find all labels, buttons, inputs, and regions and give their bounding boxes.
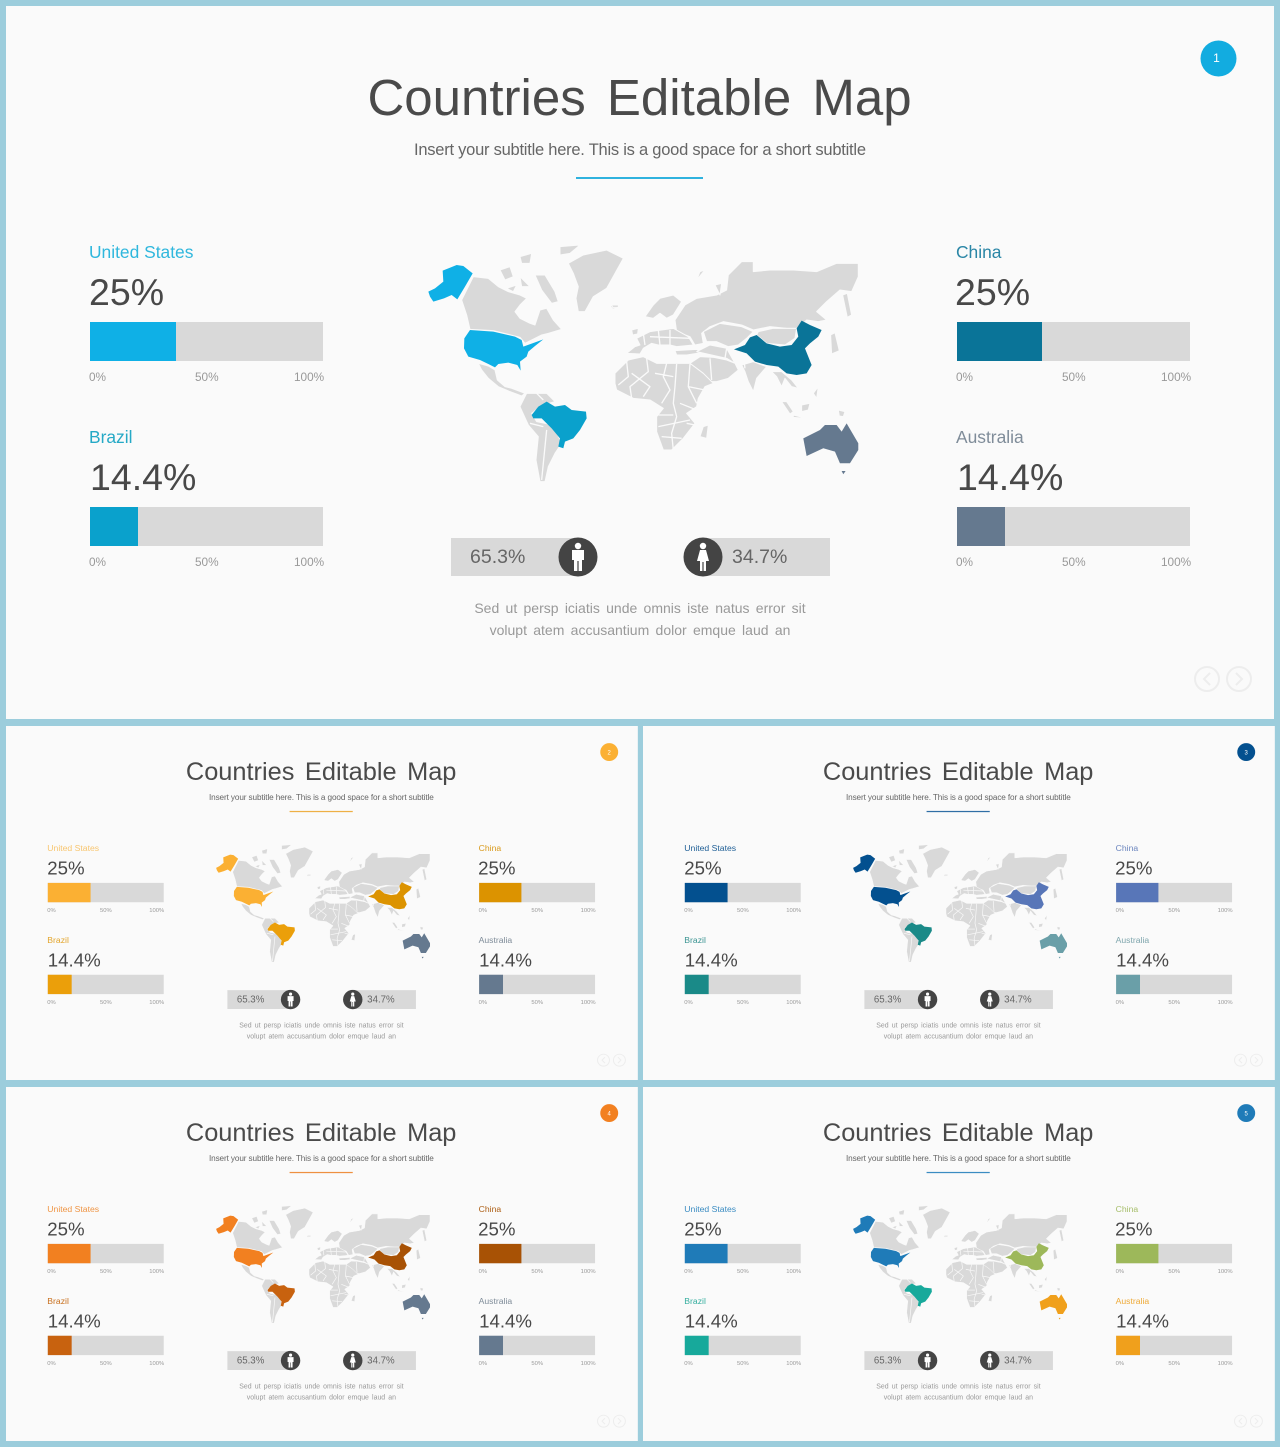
stat: Brazil: Brazil	[47, 935, 69, 945]
subtitle: Insert your subtitle here. This is a good space for a short subtitle	[846, 793, 1071, 802]
stat: Australia: 50%	[1168, 1361, 1180, 1367]
subtitle: Insert your subtitle here. This is a good space for a short subtitle	[209, 793, 434, 802]
stat: Brazil: Brazil	[684, 1296, 706, 1306]
stat: Brazil: 0%	[89, 555, 107, 569]
description: volupt atem accusantium dolor emque laud an	[247, 1033, 396, 1040]
stat: Brazil: 50%	[100, 1361, 112, 1367]
male share: 65.3%	[470, 546, 525, 568]
world map	[428, 245, 858, 482]
stat: Brazil: 100%	[786, 1000, 801, 1006]
description	[474, 600, 806, 638]
stat: United States	[684, 843, 801, 914]
stat: China: 50%	[531, 908, 543, 914]
description	[239, 1022, 404, 1040]
stat: Australia: Australia	[1116, 935, 1149, 945]
stat: United States: 0%	[89, 370, 107, 384]
stat: Brazil: Brazil	[684, 935, 706, 945]
description	[239, 1383, 404, 1401]
stat: China: 25%	[1115, 1218, 1152, 1239]
stat: United States: 50%	[195, 370, 219, 384]
title underline	[927, 1172, 990, 1173]
world map	[853, 845, 1067, 962]
male share: 65.3%	[237, 1356, 265, 1367]
stat: Brazil: 100%	[149, 1000, 164, 1006]
female share: 34.7%	[1004, 995, 1032, 1006]
stat: China	[1115, 843, 1233, 914]
stat: Australia: 0%	[1116, 1361, 1124, 1367]
stat: Brazil	[47, 1296, 164, 1367]
male share	[864, 1351, 937, 1370]
stat: Australia	[1116, 935, 1233, 1006]
stat: United States: 50%	[737, 908, 749, 914]
stat: China: China	[1116, 843, 1138, 853]
male share: 65.3%	[874, 995, 902, 1006]
page badge	[1237, 743, 1255, 761]
stat: China	[1115, 1204, 1233, 1275]
nav arrows	[1235, 1054, 1262, 1066]
page badge: 1	[1213, 51, 1220, 65]
page badge	[1200, 40, 1236, 76]
stat: Australia: 14.4%	[479, 949, 532, 970]
stat: Brazil	[47, 935, 164, 1006]
stat: United States: 100%	[294, 370, 325, 384]
stat: United States: United States	[47, 1204, 99, 1214]
stat: United States: United States	[684, 843, 736, 853]
title: Countries Editable Map	[186, 758, 456, 786]
stat: United States	[47, 843, 164, 914]
stat: Brazil	[89, 427, 325, 569]
stat: Australia: 14.4%	[957, 456, 1063, 498]
stat: United States	[684, 1204, 801, 1275]
stat: Australia: 14.4%	[1116, 1310, 1169, 1331]
stat: United States: 25%	[47, 857, 85, 878]
stat: China: 100%	[581, 1269, 596, 1275]
stat: United States: 100%	[786, 1269, 801, 1275]
stat: United States: 100%	[149, 1269, 164, 1275]
stat: Australia: 100%	[1161, 555, 1192, 569]
stat: Australia	[479, 1296, 596, 1367]
stat: United States: 25%	[47, 1218, 85, 1239]
stat: Brazil: 14.4%	[48, 1310, 101, 1331]
nav arrows	[1195, 667, 1251, 691]
title: Countries Editable Map	[823, 758, 1093, 786]
stat: Brazil: 50%	[737, 1361, 749, 1367]
title underline	[290, 811, 353, 812]
world map	[853, 1206, 1067, 1323]
stat: United States: 0%	[684, 1269, 693, 1275]
stat: Brazil: 14.4%	[685, 1310, 738, 1331]
stat: Australia: 14.4%	[479, 1310, 532, 1331]
stat: Brazil: 50%	[195, 555, 219, 569]
stat: Australia: Australia	[479, 1296, 512, 1306]
stat: China: China	[1116, 1204, 1138, 1214]
stat: China: 50%	[1168, 908, 1180, 914]
stat: China: 0%	[479, 908, 487, 914]
stat: Australia: 0%	[956, 555, 974, 569]
stat: Brazil: 0%	[684, 1361, 693, 1367]
panel: main slide 1	[6, 6, 1274, 719]
page badge: 3	[1245, 750, 1249, 756]
stat: Australia: 14.4%	[1116, 949, 1169, 970]
description: volupt atem accusantium dolor emque laud an	[884, 1394, 1033, 1401]
page badge: 5	[1245, 1111, 1249, 1117]
stat: Australia: 0%	[479, 1361, 487, 1367]
stat: China: 50%	[531, 1269, 543, 1275]
panel: slide 3 navy-teal	[643, 726, 1275, 1080]
stat: China	[478, 843, 596, 914]
stat: Australia: 100%	[1218, 1000, 1233, 1006]
male share	[227, 1351, 300, 1370]
stat: Australia: 50%	[531, 1361, 543, 1367]
stat: Australia: 100%	[1218, 1361, 1233, 1367]
title: Countries Editable Map	[186, 1119, 456, 1147]
stat: Australia: 100%	[581, 1361, 596, 1367]
title underline	[576, 177, 703, 179]
stat: United States: 50%	[737, 1269, 749, 1275]
stat: United States: 25%	[684, 1218, 722, 1239]
female share: 34.7%	[732, 546, 787, 568]
female share	[343, 990, 416, 1009]
stat: United States: 50%	[100, 908, 112, 914]
stat: United States	[89, 242, 325, 384]
title underline	[927, 811, 990, 812]
stat: China: 50%	[1062, 370, 1086, 384]
stat: Brazil	[684, 1296, 801, 1367]
subtitle: Insert your subtitle here. This is a good space for a short subtitle	[209, 1154, 434, 1163]
page badge: 4	[608, 1111, 612, 1117]
description	[876, 1383, 1041, 1401]
stat: Australia: 50%	[1062, 555, 1086, 569]
stat: Australia: 50%	[1168, 1000, 1180, 1006]
stat: United States: United States	[47, 843, 99, 853]
stat: United States: 0%	[47, 908, 56, 914]
stat: United States: United States	[684, 1204, 736, 1214]
stat: United States: 100%	[786, 908, 801, 914]
female share	[343, 1351, 416, 1370]
nav arrows	[1235, 1415, 1262, 1427]
stat: Brazil: 0%	[47, 1361, 56, 1367]
stat: China: 100%	[1218, 908, 1233, 914]
male share: 65.3%	[874, 1356, 902, 1367]
nav arrows	[598, 1415, 625, 1427]
stat: China: 50%	[1168, 1269, 1180, 1275]
female share	[980, 990, 1053, 1009]
stat: Brazil: 0%	[684, 1000, 693, 1006]
stat: China: 0%	[1116, 1269, 1124, 1275]
description: Sed ut persp iciatis unde omnis iste natus error sit	[474, 600, 806, 616]
description	[876, 1022, 1041, 1040]
page badge	[600, 743, 618, 761]
stat: United States: 0%	[684, 908, 693, 914]
panel: slide 2 orange-yellow	[6, 726, 638, 1080]
stat: China: 0%	[1116, 908, 1124, 914]
stat: Brazil: Brazil	[89, 427, 132, 447]
male share	[451, 538, 598, 576]
description: Sed ut persp iciatis unde omnis iste natus error sit	[239, 1022, 404, 1029]
page badge	[1237, 1104, 1255, 1122]
stat: United States: United States	[89, 242, 194, 262]
stat: China: 0%	[956, 370, 974, 384]
title underline	[290, 1172, 353, 1173]
stat: China: China	[479, 843, 501, 853]
stat: Brazil	[684, 935, 801, 1006]
stat: Brazil: 100%	[294, 555, 325, 569]
stat: United States	[47, 1204, 164, 1275]
panel: slide 5 multicolour	[643, 1087, 1275, 1441]
description: volupt atem accusantium dolor emque laud an	[884, 1033, 1033, 1040]
stat: Australia: 0%	[479, 1000, 487, 1006]
description: volupt atem accusantium dolor emque laud an	[247, 1394, 396, 1401]
stat: Brazil: 100%	[149, 1361, 164, 1367]
stat: Australia: Australia	[479, 935, 512, 945]
stat: China: 25%	[478, 857, 515, 878]
description: Sed ut persp iciatis unde omnis iste natus error sit	[876, 1022, 1041, 1029]
stat: Australia	[479, 935, 596, 1006]
stat: Australia: 50%	[531, 1000, 543, 1006]
stat: Australia: 0%	[1116, 1000, 1124, 1006]
female share: 34.7%	[367, 995, 395, 1006]
world map	[216, 845, 430, 962]
stat: China: 100%	[1161, 370, 1192, 384]
subtitle: Insert your subtitle here. This is a good space for a short subtitle	[846, 1154, 1071, 1163]
stat: United States: 100%	[149, 908, 164, 914]
male share: 65.3%	[237, 995, 265, 1006]
stat: Australia	[956, 427, 1192, 569]
stat: China	[478, 1204, 596, 1275]
stat: United States: 25%	[89, 271, 164, 313]
description: Sed ut persp iciatis unde omnis iste natus error sit	[876, 1383, 1041, 1390]
nav arrows	[598, 1054, 625, 1066]
stat: Brazil: 50%	[737, 1000, 749, 1006]
stat: Australia: Australia	[956, 427, 1024, 447]
stat: China: 100%	[1218, 1269, 1233, 1275]
stat: China: China	[956, 242, 1002, 262]
page badge	[600, 1104, 618, 1122]
page badge: 2	[608, 750, 612, 756]
female share	[684, 538, 830, 576]
stat: Brazil: Brazil	[47, 1296, 69, 1306]
stat: Brazil: 14.4%	[685, 949, 738, 970]
description: volupt atem accusantium dolor emque laud an	[490, 622, 790, 638]
stat: Brazil: 100%	[786, 1361, 801, 1367]
title: Countries Editable Map	[367, 69, 912, 126]
stat: China: 25%	[478, 1218, 515, 1239]
title: Countries Editable Map	[823, 1119, 1093, 1147]
stat: Australia: Australia	[1116, 1296, 1149, 1306]
stat: China	[955, 242, 1192, 384]
stat: United States: 25%	[684, 857, 722, 878]
stat: United States: 50%	[100, 1269, 112, 1275]
panel: slide 4 orange-brown	[6, 1087, 638, 1441]
stat: Brazil: 14.4%	[90, 456, 196, 498]
subtitle: Insert your subtitle here. This is a good space for a short subtitle	[414, 141, 866, 159]
male share	[864, 990, 937, 1009]
female share: 34.7%	[367, 1356, 395, 1367]
male share	[227, 990, 300, 1009]
stat: China: 25%	[1115, 857, 1152, 878]
description: Sed ut persp iciatis unde omnis iste natus error sit	[239, 1383, 404, 1390]
stat: United States: 0%	[47, 1269, 56, 1275]
world map	[216, 1206, 430, 1323]
stat: Brazil: 14.4%	[48, 949, 101, 970]
female share: 34.7%	[1004, 1356, 1032, 1367]
stat: China: 0%	[479, 1269, 487, 1275]
stat: Australia	[1116, 1296, 1233, 1367]
stat: Australia: 100%	[581, 1000, 596, 1006]
stat: Brazil: 0%	[47, 1000, 56, 1006]
stat: China: 100%	[581, 908, 596, 914]
stat: China: 25%	[955, 271, 1030, 313]
female share	[980, 1351, 1053, 1370]
stat: China: China	[479, 1204, 501, 1214]
stat: Brazil: 50%	[100, 1000, 112, 1006]
